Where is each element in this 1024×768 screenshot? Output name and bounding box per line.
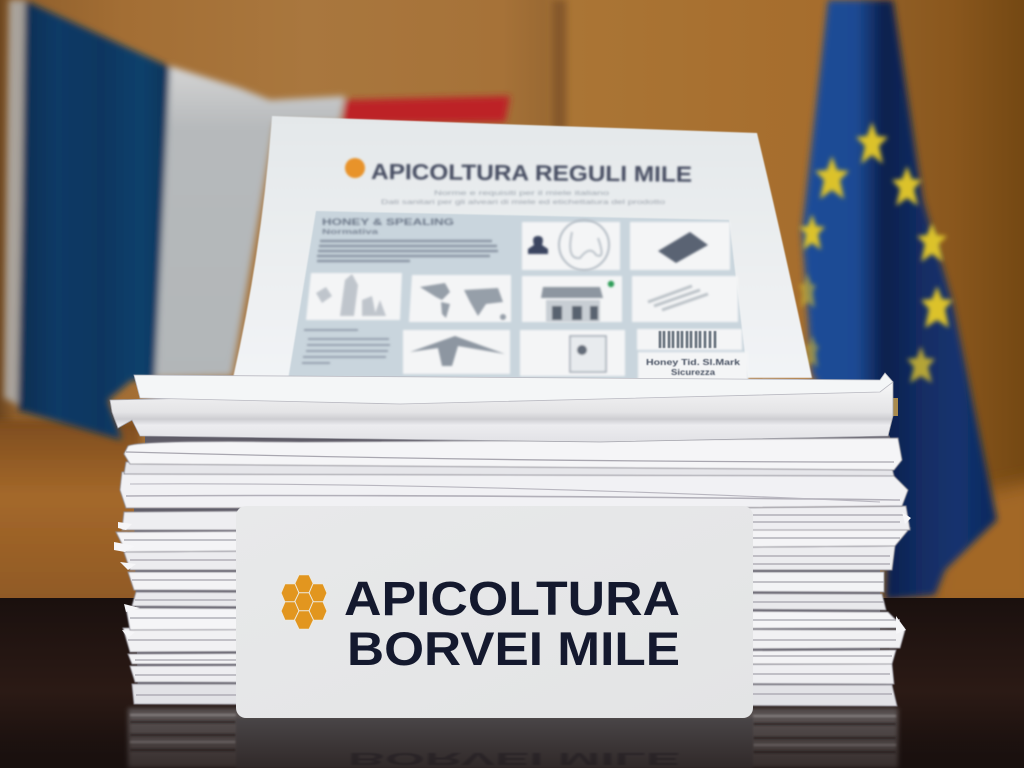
- card text: brand name: BORVEI MILE: [347, 622, 680, 675]
- flag: French tricolour: [4, 0, 510, 440]
- document info panel: [288, 211, 748, 380]
- icon: pallet diagram: [648, 286, 708, 310]
- reflection of stack and card: [0, 708, 1024, 768]
- document: regulation sheet standing on the stack: [233, 116, 812, 382]
- lower stack of loose papers: [116, 506, 910, 706]
- icon: person and globe: [528, 220, 609, 270]
- icon: tablet: [658, 232, 708, 263]
- lower stack sheet edges: [124, 515, 905, 695]
- icon: winged hive: [410, 336, 505, 366]
- brand card: [236, 506, 753, 718]
- stack shadow core: [134, 432, 892, 704]
- side note text: [302, 330, 390, 363]
- label text: [646, 358, 741, 377]
- logo: honeycomb: [281, 575, 327, 629]
- top sheaf: [134, 373, 893, 404]
- document subtitle: [381, 191, 666, 206]
- panel cell grid: [306, 222, 748, 382]
- label text: Honey Tid. Sl.Mark: [646, 358, 741, 367]
- thick upper sheaf: [110, 382, 893, 442]
- icon: world map: [420, 283, 506, 320]
- table surface: [0, 598, 1024, 768]
- barcode: [660, 331, 715, 348]
- panel heading: Normativa: [322, 229, 378, 236]
- label text: Sicurezza: [671, 368, 716, 377]
- document title: APICOLTURA REGULI MILE: [371, 159, 692, 187]
- flag: European Union: [799, 0, 997, 600]
- icon: bag: [570, 336, 606, 372]
- panel heading: [317, 217, 498, 261]
- panel heading: HONEY & SPEALING: [322, 217, 454, 227]
- icon: people sketch: [316, 274, 386, 316]
- flag stars: [799, 122, 953, 383]
- document subtitle: Dati sanitari per gli alveari di miele ed etichettatura del prodotto: [381, 200, 666, 206]
- gold binder tab: [892, 398, 898, 416]
- wooden wall background: [0, 0, 1024, 610]
- card text: brand name: APICOLTURA: [344, 573, 680, 626]
- card text: brand name: [344, 573, 680, 675]
- middle sheaf: [120, 438, 908, 508]
- document subtitle: Norme e requisiti per il miele italiano: [434, 191, 610, 197]
- paper stack: [110, 373, 911, 706]
- icon: shop building: [541, 281, 614, 322]
